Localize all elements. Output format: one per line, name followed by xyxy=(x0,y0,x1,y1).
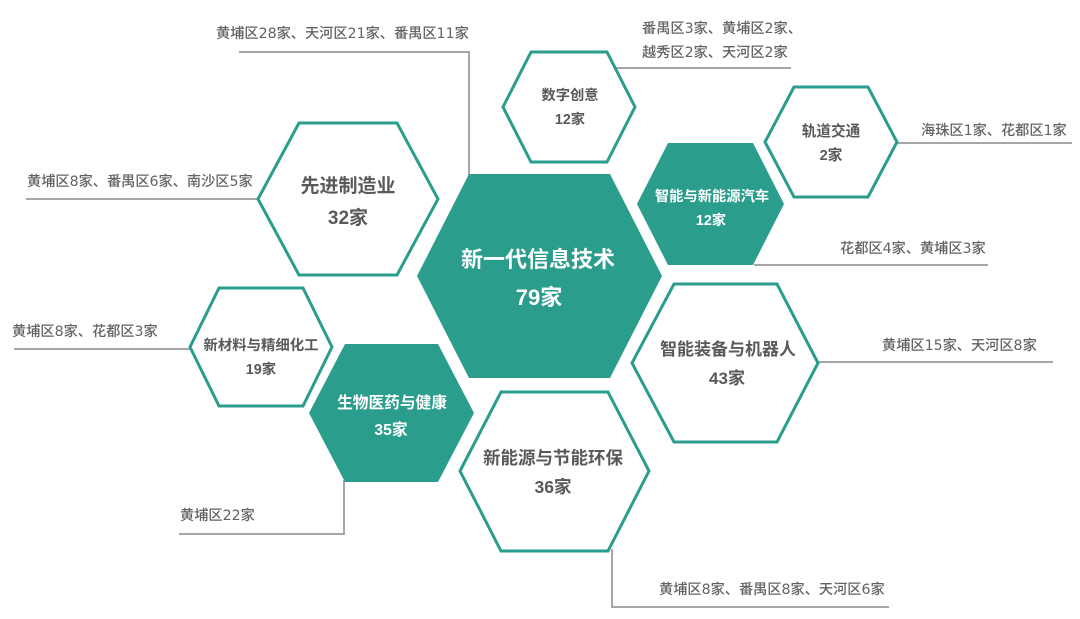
label: biomedicine districts: 黄埔区22家 xyxy=(180,507,255,524)
connector: new energy xyxy=(612,549,889,607)
connector: smart vehicles xyxy=(754,264,988,266)
label: advanced manufacturing districts: 黄埔区8家、番禺区6家、南沙区5家 xyxy=(27,173,253,190)
connector: smart equipment xyxy=(817,361,1053,363)
connector: advanced manufacturing xyxy=(26,198,258,200)
hexagon: new energy and environmental protection: 36家 xyxy=(535,477,572,497)
hexagon: digital creative xyxy=(503,52,635,162)
label: new materials districts: 黄埔区8家、花都区3家 xyxy=(12,323,158,340)
hexagon: digital creative: 12家 xyxy=(555,110,585,128)
hexagon: new generation IT xyxy=(417,174,662,378)
connector: biomedicine xyxy=(179,480,344,534)
hexagon: smart and new energy vehicles: 智能与新能源汽车 xyxy=(655,187,769,205)
hexagon: rail transit xyxy=(765,87,897,197)
hexagon: new generation IT: 新一代信息技术 xyxy=(461,247,615,272)
label: smart vehicles districts: 花都区4家、黄埔区3家 xyxy=(840,240,986,257)
connector: new materials xyxy=(14,348,192,350)
hexagon: new materials and fine chemicals: 19家 xyxy=(246,360,277,378)
connector: rail transit xyxy=(896,142,1072,144)
hexagon: biomedicine and health xyxy=(309,344,474,482)
hexagon: smart equipment and robots xyxy=(632,284,818,442)
hexagon: advanced manufacturing: 先进制造业 xyxy=(300,175,396,197)
hexagon: new materials and fine chemicals xyxy=(190,288,332,406)
hexagon: smart and new energy vehicles xyxy=(637,143,784,265)
label: smart equipment districts: 黄埔区15家、天河区8家 xyxy=(882,337,1037,354)
label: new generation IT districts: 黄埔区28家、天河区21家、番禺区11家 xyxy=(216,25,469,42)
hexagon: new materials and fine chemicals: 新材料与精细化工 xyxy=(203,336,319,354)
hexagon: digital creative: 数字创意 xyxy=(541,86,599,104)
hexagon: advanced manufacturing xyxy=(258,123,438,275)
hexagon: rail transit: 2家 xyxy=(820,146,843,164)
hexagon: rail transit: 轨道交通 xyxy=(802,122,861,140)
hexagon: biomedicine and health: 生物医药与健康 xyxy=(337,393,447,412)
label: digital creative districts: 越秀区2家、天河区2家 xyxy=(642,44,788,61)
label: digital creative districts xyxy=(642,20,802,61)
hexagon: new energy and environmental protection: 新能源与节能环保 xyxy=(483,448,623,468)
label: rail transit districts: 海珠区1家、花都区1家 xyxy=(921,122,1067,139)
hexagon: smart equipment and robots: 智能装备与机器人 xyxy=(660,339,796,359)
connector: new generation IT xyxy=(239,52,469,175)
connector: digital creative xyxy=(616,67,791,69)
hexagon: biomedicine and health: 35家 xyxy=(374,420,408,439)
hexagon: smart equipment and robots: 43家 xyxy=(709,368,745,388)
hexagon: smart and new energy vehicles: 12家 xyxy=(696,211,726,229)
hexagon: new energy and environmental protection xyxy=(460,392,649,551)
hexagon: new generation IT: 79家 xyxy=(516,285,562,310)
hexagon: advanced manufacturing: 32家 xyxy=(328,206,368,229)
label: new energy districts: 黄埔区8家、番禺区8家、天河区6家 xyxy=(659,581,885,598)
label: digital creative districts: 番禺区3家、黄埔区2家、 xyxy=(642,20,802,37)
